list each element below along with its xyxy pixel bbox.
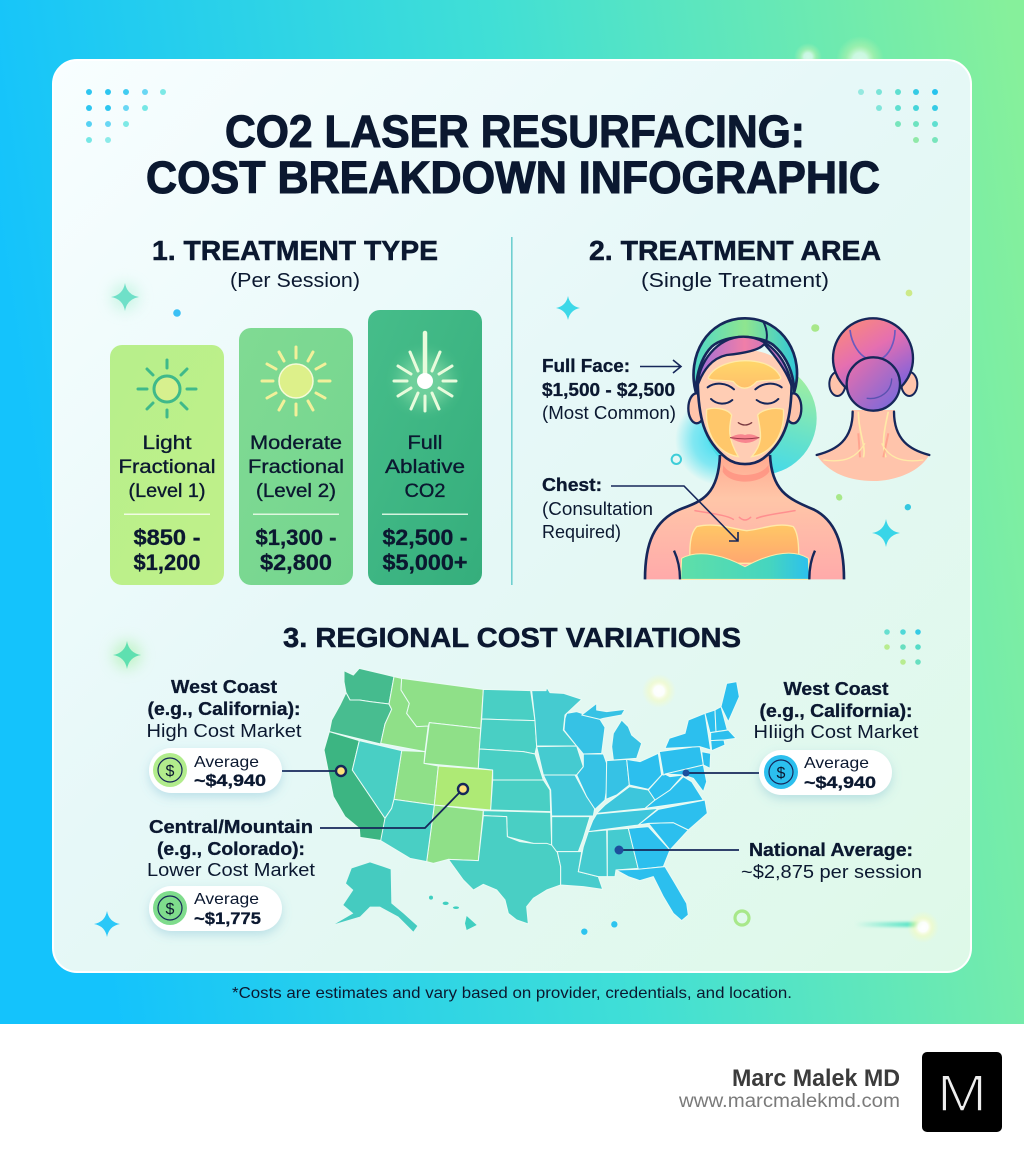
hair <box>694 318 797 392</box>
forehead treatment area <box>708 361 781 388</box>
card price: $850 - <box>134 525 200 550</box>
callout: full face: Full Face: <box>542 356 630 376</box>
illustration: treatment area figures <box>645 318 929 579</box>
card price <box>256 525 336 575</box>
text: west coast left: West Coast <box>171 677 277 697</box>
icon: dollar coin: $ <box>777 765 786 782</box>
glow light <box>642 674 676 708</box>
hair bun <box>847 357 900 411</box>
footer band <box>0 1024 1024 1154</box>
callout: chest <box>542 475 738 542</box>
title: CO2 LASER RESURFACING: <box>225 106 805 157</box>
text: west coast right: West Coast <box>784 679 888 699</box>
figure: front view <box>645 318 844 579</box>
hawaii <box>429 896 477 930</box>
strapless top <box>681 553 809 579</box>
text: central mountain: Lower Cost Market <box>147 860 315 880</box>
sparkles: lower left <box>94 641 141 937</box>
icon: light sun <box>138 360 196 417</box>
card price: $5,000+ <box>382 550 468 575</box>
west coast states <box>324 668 394 841</box>
card label <box>248 432 344 502</box>
text: central mountain <box>147 817 315 880</box>
icon: moderate sun <box>262 347 330 415</box>
text: west coast right <box>754 679 918 742</box>
footer brand text <box>678 1065 900 1112</box>
card label: Moderate <box>250 432 342 454</box>
heading: treatment type: 1. TREATMENT TYPE <box>152 235 438 266</box>
callout: full face: (Most Common) <box>542 403 676 423</box>
card label: Ablative <box>385 456 465 478</box>
text: central mountain: (e.g., Colorado): <box>157 839 305 859</box>
text: national average <box>741 840 922 882</box>
pill: central mountain <box>149 886 282 931</box>
text: west coast left <box>146 677 302 741</box>
connector: central mountain <box>320 784 468 828</box>
card label: CO2 <box>404 480 446 502</box>
back of head <box>833 318 913 398</box>
heading: treatment type <box>152 235 438 292</box>
text: national average: ~$2,875 per session <box>741 862 922 882</box>
map accent dots <box>581 921 617 935</box>
icon: dollar coin: $ <box>166 901 175 918</box>
footer logo: M <box>937 1065 987 1123</box>
accent dots <box>812 324 911 510</box>
great lakes states <box>564 703 658 832</box>
top glow lights <box>794 36 884 84</box>
card price <box>134 525 200 575</box>
card price <box>382 525 468 575</box>
panel: light fractional card <box>110 345 224 585</box>
card label: (Level 2) <box>256 480 336 502</box>
panel: moderate fractional card <box>239 328 353 585</box>
pill: west coast right: ~$4,940 <box>804 773 876 792</box>
figure: back view <box>817 318 929 481</box>
lower right accents <box>735 911 939 943</box>
connector: west coast left <box>282 766 346 776</box>
title: COST BREAKDOWN INFOGRAPHIC <box>146 152 880 203</box>
eyes and brows <box>708 384 782 404</box>
text: west coast right: (e.g., California): <box>760 701 912 721</box>
card label: Fractional <box>118 456 216 478</box>
card label: Fractional <box>248 456 344 478</box>
card price: $2,500 - <box>382 525 468 550</box>
ring accent <box>672 455 681 464</box>
heading: treatment type: (Per Session) <box>230 270 360 292</box>
text: west coast right: HIiigh Cost Market <box>754 722 918 742</box>
card price: $1,200 <box>134 550 200 575</box>
footer logo <box>922 1052 1002 1132</box>
decorative dots: top left <box>86 89 166 143</box>
chest treatment area <box>690 525 799 563</box>
callout: chest: Chest: <box>542 475 602 495</box>
back neck and shoulders <box>817 410 929 481</box>
card label <box>385 432 465 502</box>
heading: treatment area: 2. TREATMENT AREA <box>589 235 881 266</box>
footnote: *Costs are estimates and vary based on provider, credentials, and location. <box>232 985 792 1002</box>
sparkles and dots: upper section <box>111 283 912 547</box>
text: national average: National Average: <box>749 840 913 860</box>
cheek treatment areas <box>706 408 738 457</box>
card label: Light <box>142 432 192 454</box>
text: central mountain: Central/Mountain <box>149 817 313 837</box>
southwest and central states <box>352 687 638 924</box>
title <box>146 106 880 203</box>
heading: regional cost variations: 3. REGIONAL COST VARIATIONS <box>283 622 741 653</box>
pill: central mountain: ~$1,775 <box>194 909 261 928</box>
eastern states <box>616 682 739 921</box>
decorative dots: top right <box>858 89 938 143</box>
ears <box>688 393 705 423</box>
arrow: full face <box>640 360 681 373</box>
alaska <box>335 862 417 932</box>
text: west coast left: (e.g., California): <box>148 699 300 719</box>
pill: central mountain: Average <box>194 891 259 908</box>
glow behind head <box>675 395 765 485</box>
text: west coast left: High Cost Market <box>146 721 302 741</box>
shoulders and neck outline <box>645 455 844 579</box>
heading: treatment area <box>589 235 881 292</box>
nose and mouth <box>738 423 752 425</box>
shoulders and neck fill <box>645 455 844 579</box>
pill: west coast left <box>149 748 282 793</box>
card price: $1,300 - <box>256 525 336 550</box>
map: United States <box>324 668 739 935</box>
arrow: chest <box>611 486 738 541</box>
card price: $2,800 <box>260 550 332 575</box>
callout: full face <box>542 356 681 423</box>
pill: west coast right: Average <box>804 755 869 772</box>
pill: west coast left: Average <box>194 754 259 771</box>
card label <box>118 432 216 502</box>
panel: full ablative card <box>368 310 482 585</box>
callout: chest: Required) <box>542 522 621 542</box>
collarbones <box>695 511 795 520</box>
callout: chest: (Consultation <box>542 499 653 519</box>
decorative dots: section 3 <box>884 629 921 665</box>
card label: (Level 1) <box>128 480 206 502</box>
section divider <box>511 237 513 585</box>
callout: full face: $1,500 - $2,500 <box>542 380 675 400</box>
connector: east coast <box>682 770 759 776</box>
face outline <box>698 380 792 464</box>
footer brand text: www.marcmalekmd.com <box>678 1091 900 1112</box>
icon: dollar coin: $ <box>166 763 175 780</box>
icon: laser burst <box>394 333 456 411</box>
pill: west coast right <box>759 750 892 795</box>
connector: national average <box>614 846 739 854</box>
heading: treatment area: (Single Treatment) <box>641 270 829 292</box>
face fill <box>698 350 792 464</box>
footer brand text: Marc Malek MD <box>732 1065 900 1092</box>
pill: west coast left: ~$4,940 <box>194 771 266 790</box>
card label: Full <box>408 432 442 454</box>
mountain states <box>381 677 493 863</box>
main card panel <box>53 60 971 972</box>
